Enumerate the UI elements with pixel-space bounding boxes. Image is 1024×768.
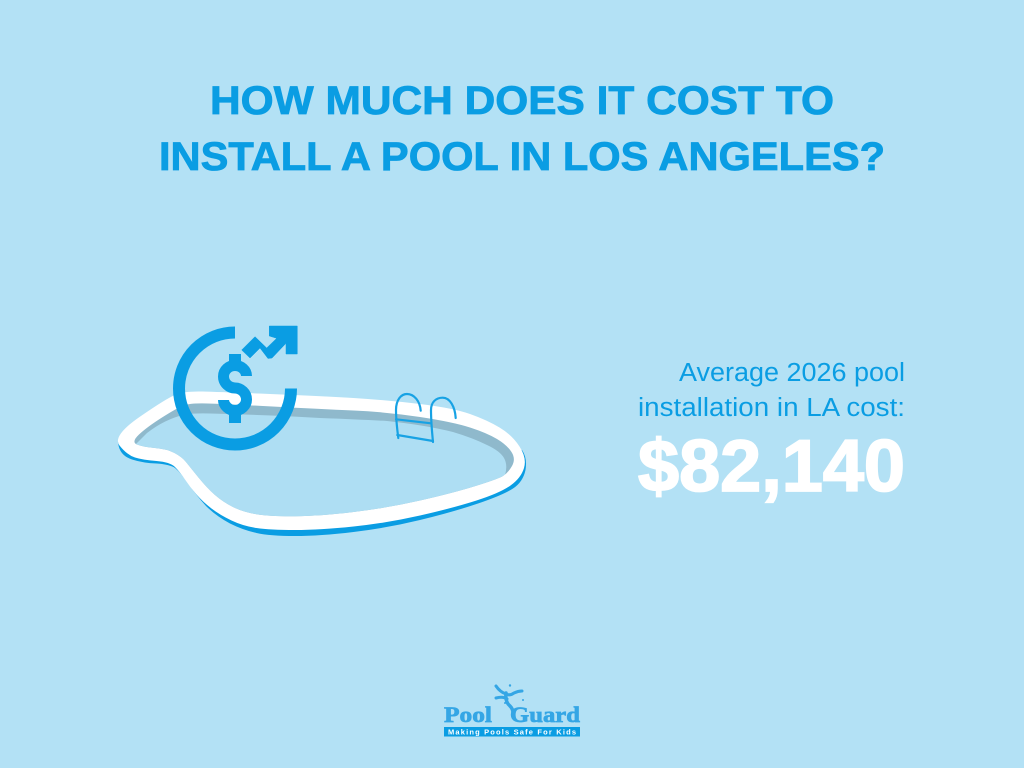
icon: rising cost bbox=[179, 326, 297, 445]
logo wordmark: Pool bbox=[444, 702, 492, 727]
logo splash bbox=[496, 684, 524, 713]
open ring bbox=[179, 332, 291, 445]
pool water bbox=[136, 413, 506, 516]
logo bbox=[444, 684, 580, 736]
logo wordmark: Guard bbox=[510, 702, 580, 727]
logo wordmark bbox=[444, 702, 580, 727]
cost caption: Average 2026 pool bbox=[679, 359, 905, 387]
icon: pool ladder bbox=[396, 394, 456, 442]
pool white rim bbox=[118, 391, 525, 530]
pool inner wall bbox=[134, 403, 514, 516]
pool shadow edge bbox=[118, 440, 526, 536]
dollar symbol bbox=[224, 354, 246, 423]
logo tagline bar bbox=[444, 727, 580, 736]
pool illustration bbox=[118, 391, 526, 536]
logo tagline: Making Pools Safe For Kids bbox=[448, 728, 576, 736]
title: INSTALL A POOL IN LOS ANGELES? bbox=[159, 135, 885, 179]
cost caption: installation in LA cost: bbox=[638, 394, 905, 422]
title: HOW MUCH DOES IT COST TO bbox=[210, 79, 834, 123]
cost figure: $82,140 bbox=[638, 426, 905, 507]
title bbox=[159, 79, 885, 179]
rising arrow bbox=[242, 326, 297, 358]
cost caption bbox=[638, 359, 905, 422]
